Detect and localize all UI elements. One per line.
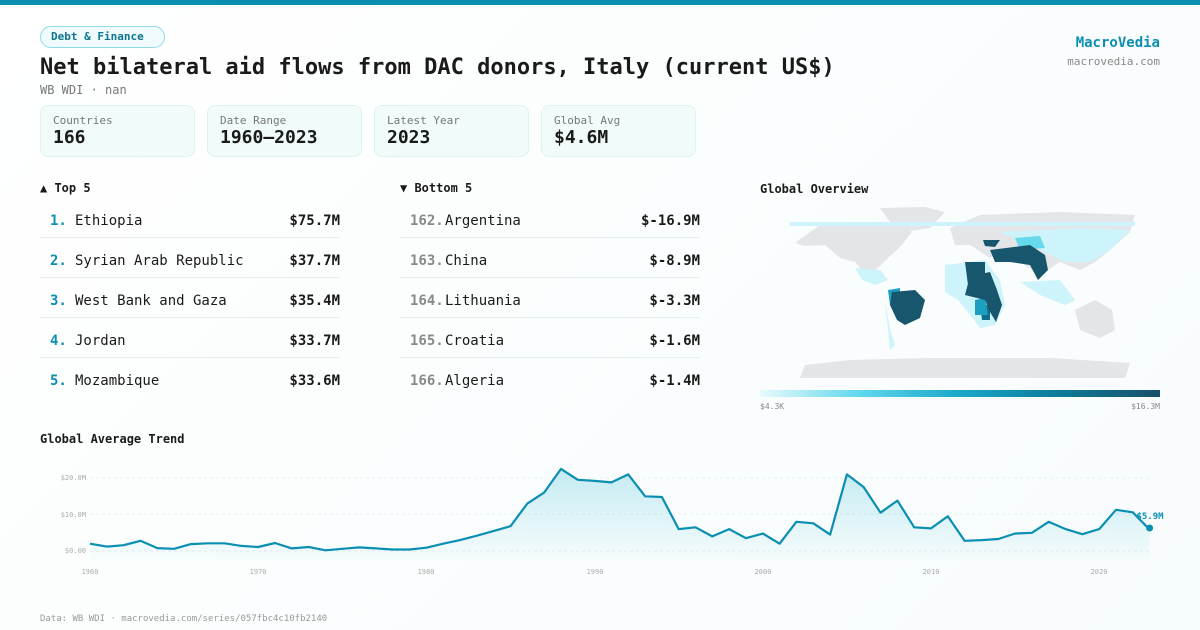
category pill [40,26,165,48]
brand: MacroVedia [1076,35,1160,51]
panel: top 5: $75.7M [289,213,340,229]
line chart: 1990 [587,568,603,576]
panel: bottom 5: Croatia [445,333,504,349]
legend: color scale: $16.3M [1131,402,1160,411]
heading: trend: Global Average Trend [40,432,184,446]
panel: top 5: West Bank and Gaza [75,293,227,309]
panel: top 5: Jordan [75,333,126,349]
card: countries [40,105,195,157]
panel: top 5: Ethiopia [75,213,142,229]
panel: bottom 5: 166. [410,373,444,389]
card: countries: Countries [53,114,113,127]
footer source: Data: WB WDI · macrovedia.com/series/057fbc4c10fb2140 [40,614,327,624]
panel: top 5: 4. [50,333,67,349]
panel: bottom 5 [400,181,700,389]
heading top 5: ▲ Top 5 [40,181,91,195]
card: latest year [374,105,529,157]
line chart: 2000 [755,568,771,576]
legend: color scale: $4.3K [760,402,784,411]
panel: bottom 5: $-1.4M [649,373,700,389]
panel: top 5: 2. [50,253,67,269]
panel: bottom 5: China [445,253,487,269]
card: global avg [541,105,696,157]
panel: top 5: 1. [50,213,67,229]
brand: macrovedia.com [1067,55,1160,68]
card: date range: Date Range [220,114,286,127]
line chart [61,468,1164,576]
card: countries: 166 [53,127,86,148]
panel: bottom 5: 164. [410,293,444,309]
panel: bottom 5: Argentina [445,213,521,229]
line chart: $0.00 [65,547,86,555]
panel: bottom 5: Algeria [445,373,504,389]
line chart: 1960 [82,568,98,576]
panel: bottom 5: $-3.3M [649,293,700,309]
panel: top 5: Mozambique [75,373,159,389]
panel: top 5: $37.7M [289,253,340,269]
legend: color scale [760,390,1160,411]
panel: bottom 5: Lithuania [445,293,521,309]
line chart: 1970 [250,568,266,576]
category pill: Debt & Finance [51,30,144,43]
heading: global overview: Global Overview [760,182,868,196]
line chart: 1980 [418,568,434,576]
panel: top 5: $35.4M [289,293,340,309]
line chart: $20.0M [61,474,86,482]
panel: bottom 5: 165. [410,333,444,349]
panel: top 5: 3. [50,293,67,309]
card: date range [207,105,362,157]
panel: top 5: 5. [50,373,67,389]
line chart: $10.0M [61,511,86,519]
subtitle: WB WDI · nan [40,83,127,97]
panel: top 5: Syrian Arab Republic [75,253,244,269]
panel: bottom 5: $-1.6M [649,333,700,349]
heading bottom 5: ▼ Bottom 5 [400,181,472,195]
line chart: $5.9M [1136,512,1164,522]
card: global avg: $4.6M [554,127,608,148]
panel: bottom 5: $-8.9M [649,253,700,269]
top bar [0,0,1200,5]
card: date range: 1960–2023 [220,127,318,148]
panel: top 5 [40,181,340,389]
card: latest year: 2023 [387,127,430,148]
panel: bottom 5: 163. [410,253,444,269]
panel: bottom 5: $-16.9M [641,213,700,229]
panel: bottom 5: 162. [410,213,444,229]
card: global avg: Global Avg [554,114,620,127]
map [790,207,1135,378]
panel: top 5: $33.7M [289,333,340,349]
line chart: 2010 [923,568,939,576]
brand [1067,35,1160,68]
title: Net bilateral aid flows from DAC donors, Italy (current US$) [40,55,835,80]
panel: top 5: $33.6M [289,373,340,389]
line chart: 2020 [1091,568,1107,576]
stat cards [40,105,696,157]
card: latest year: Latest Year [387,114,460,127]
